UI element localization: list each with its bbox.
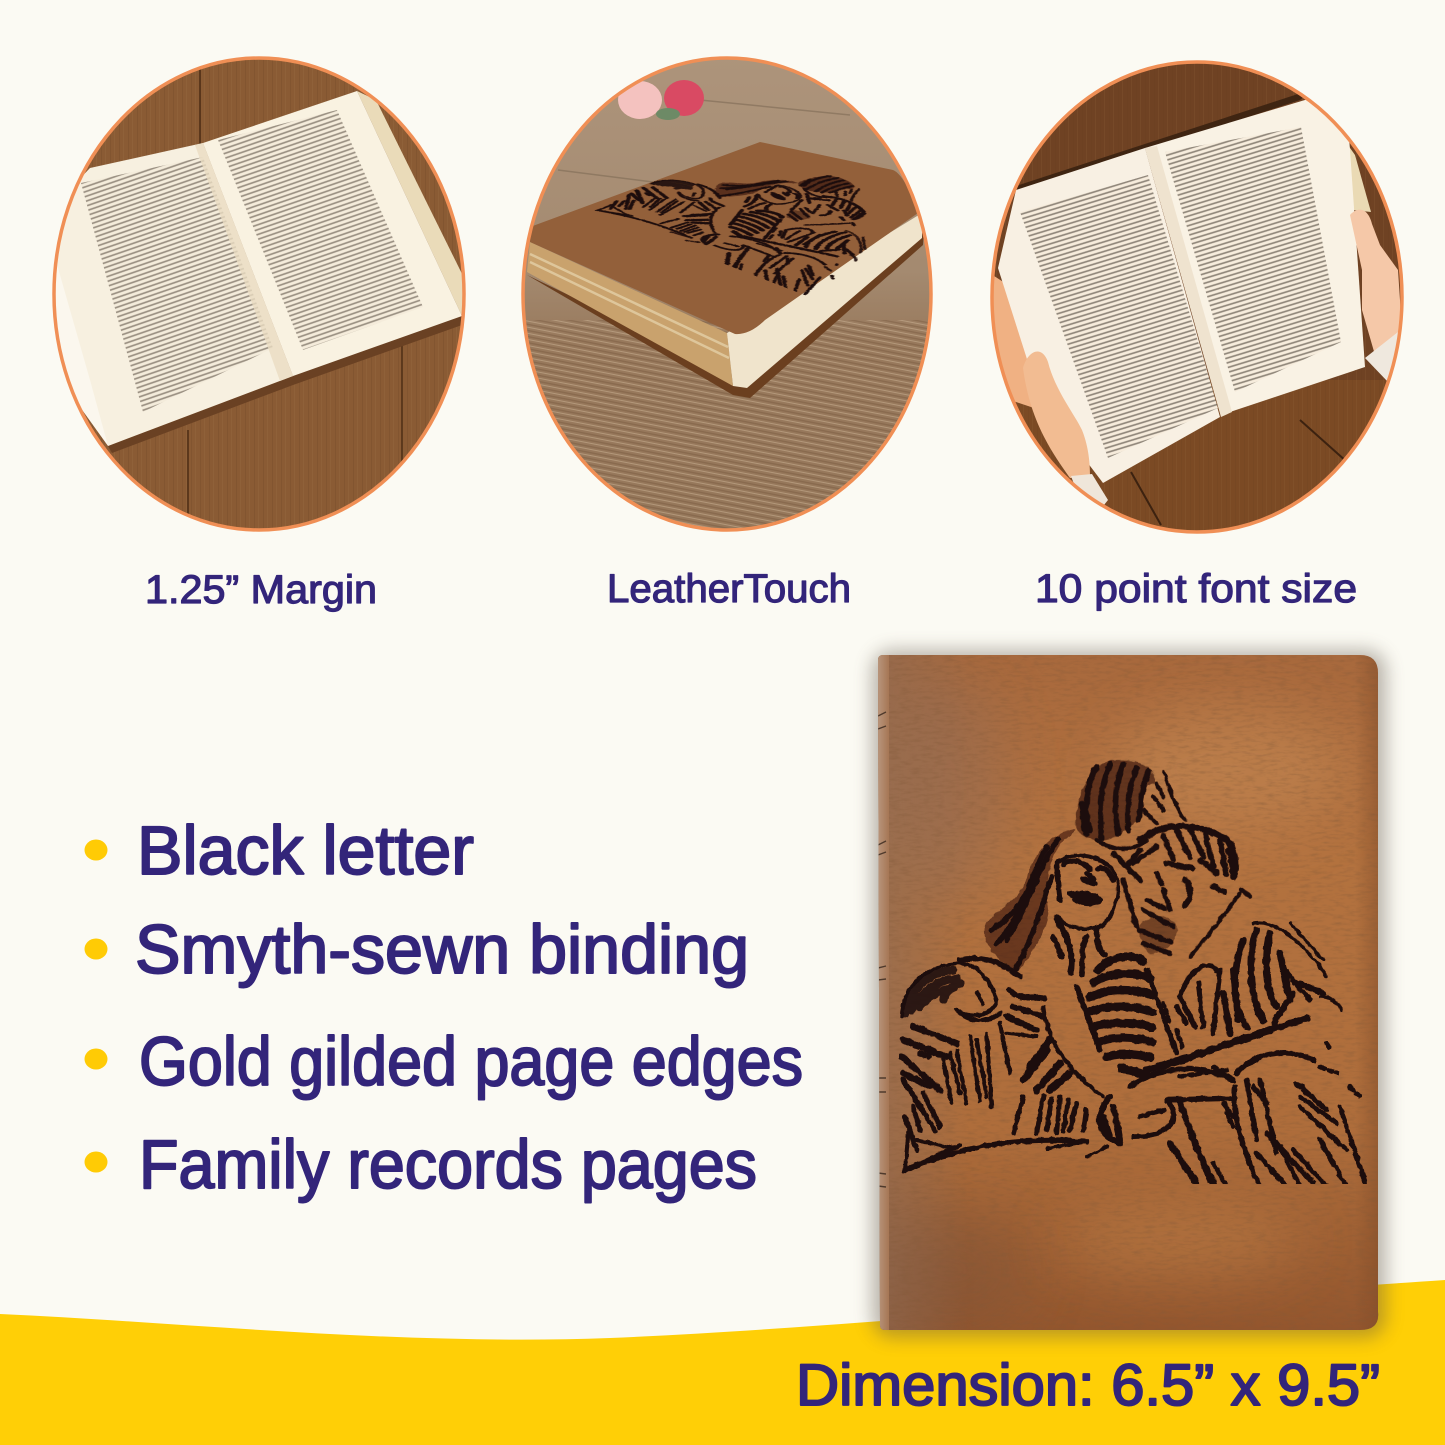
engraving on photographed cover: [594, 175, 868, 296]
knee: [1180, 1043, 1367, 1187]
caption: font size: 10 point font size: [1035, 567, 1357, 611]
man's head: [1113, 826, 1250, 957]
panel: open book, margin photo: [50, 55, 470, 535]
child's head and body: [902, 958, 1047, 1150]
bullet: black letter: [84, 840, 108, 860]
bullet: binding: [84, 938, 108, 960]
panel: closed book, leather photo: [520, 55, 956, 535]
feature: black letter: Black letter: [137, 812, 474, 889]
caption: leathertouch: LeatherTouch: [607, 567, 851, 611]
feature: binding: Smyth-sewn binding: [135, 911, 749, 988]
feature: gilded edges: Gold gilded page edges: [139, 1023, 803, 1100]
engraved family portrait: [902, 761, 1367, 1187]
bullet: gilded edges: [84, 1048, 108, 1070]
panel: hands holding book, font photo: [985, 55, 1410, 545]
yellow wave band: [0, 1280, 1445, 1445]
large leather bible cover: [870, 650, 1386, 1338]
man's arm and sleeve: [1147, 923, 1342, 1070]
striped shirt: [1077, 956, 1177, 1075]
woman's hair and face: [984, 830, 1118, 975]
top figure hair: [1077, 761, 1185, 849]
bullet: family records: [84, 1152, 108, 1172]
dimension label: Dimension: 6.5” x 9.5”: [796, 1353, 1380, 1418]
feature: family records: Family records pages: [139, 1126, 757, 1203]
caption: margin: 1.25” Margin: [145, 568, 377, 612]
torso lines and lower hands: [905, 1007, 1233, 1183]
feature list: [84, 812, 803, 1203]
